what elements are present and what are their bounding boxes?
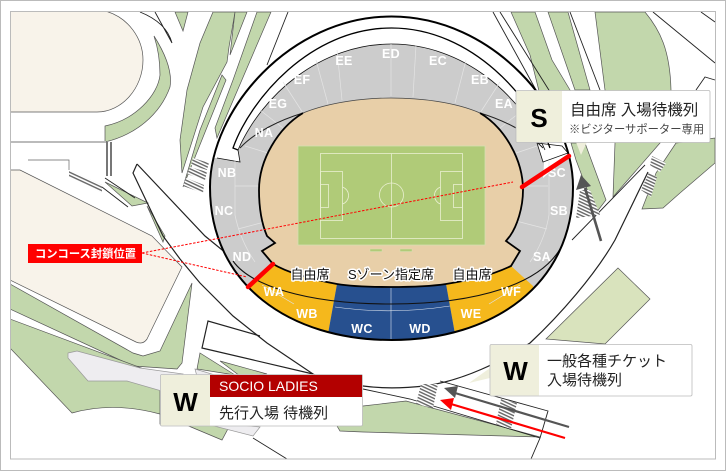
light green parking plot xyxy=(546,268,650,344)
seat block labels: SA xyxy=(533,250,551,264)
callout: W general tickets: 入場待機列 xyxy=(547,372,622,389)
closure bar right xyxy=(522,156,569,187)
callout: S gate: 自由席 入場待機列 xyxy=(570,101,698,119)
stadium xyxy=(195,16,590,345)
seat block labels: EB xyxy=(471,73,489,87)
tier line xyxy=(233,249,560,304)
seat block labels: WF xyxy=(501,285,521,299)
yellow seats WA WB xyxy=(250,266,337,332)
zone labels: Sゾーン指定席 xyxy=(348,267,434,282)
seat block labels: NA xyxy=(255,126,273,140)
concourse closure label: コンコース封鎖位置 xyxy=(35,246,136,260)
grey edges xyxy=(10,141,106,143)
callout: W general tickets xyxy=(469,344,692,396)
zone labels xyxy=(290,267,492,282)
seat block labels: WA xyxy=(264,285,284,299)
seat block labels: EE xyxy=(335,54,353,68)
hatched stairways xyxy=(69,156,666,429)
arrow: grey to S queue xyxy=(576,175,601,241)
seat block labels: EG xyxy=(269,97,287,111)
seat block labels: WE xyxy=(461,307,481,321)
seat block labels: SB xyxy=(550,204,568,218)
yellow seats WE WF xyxy=(446,266,534,332)
seat block labels: SC xyxy=(548,166,566,180)
seat block labels: EF xyxy=(294,73,310,87)
callout: W general tickets: 一般各種チケット xyxy=(547,353,667,370)
beige plot top-left xyxy=(10,12,143,112)
seat block labels: NC xyxy=(215,204,233,218)
seat block labels: ND xyxy=(233,250,251,264)
seat block labels: WD xyxy=(409,322,431,336)
arrow: red to W queue xyxy=(440,398,565,438)
stadium outer shell xyxy=(210,16,573,340)
seat block labels: WC xyxy=(351,322,373,336)
zone labels: 自由席 xyxy=(290,267,330,282)
arrow: grey to W queue xyxy=(444,386,569,427)
pale grey plaza xyxy=(68,351,260,436)
seat block labels: WB xyxy=(296,307,318,321)
concourse closure lines xyxy=(142,182,513,277)
callout: W socio ladies: 先行入場 待機列 xyxy=(219,405,328,422)
seat block labels: EA xyxy=(495,97,513,111)
seat block dividers xyxy=(234,44,550,262)
callout: S gate: S xyxy=(530,103,548,133)
callout: W socio ladies xyxy=(160,374,362,426)
stadium outer wall xyxy=(210,16,573,340)
seat block labels: ED xyxy=(382,47,400,61)
callout: W socio ladies: W xyxy=(173,387,198,417)
callout: S gate xyxy=(516,90,710,155)
blue seats WC WD xyxy=(328,284,454,339)
concourse closure label xyxy=(28,244,142,263)
callout: S gate: ※ビジターサポーター専用 xyxy=(569,123,704,136)
inner ring wall xyxy=(233,28,550,150)
pitch surround xyxy=(259,98,523,287)
beige plot lower-left xyxy=(10,170,182,343)
closure bar left xyxy=(248,264,273,287)
football pitch xyxy=(298,146,485,252)
callout: W general tickets: W xyxy=(503,356,528,386)
callout: W socio ladies: SOCIO LADIES xyxy=(219,378,318,394)
seat block labels: NB xyxy=(218,166,236,180)
seat block labels: EC xyxy=(429,54,447,68)
zone labels: 自由席 xyxy=(452,267,492,282)
seat block labels xyxy=(215,47,568,336)
upper tier line xyxy=(240,113,543,148)
seating bowl xyxy=(211,44,572,339)
